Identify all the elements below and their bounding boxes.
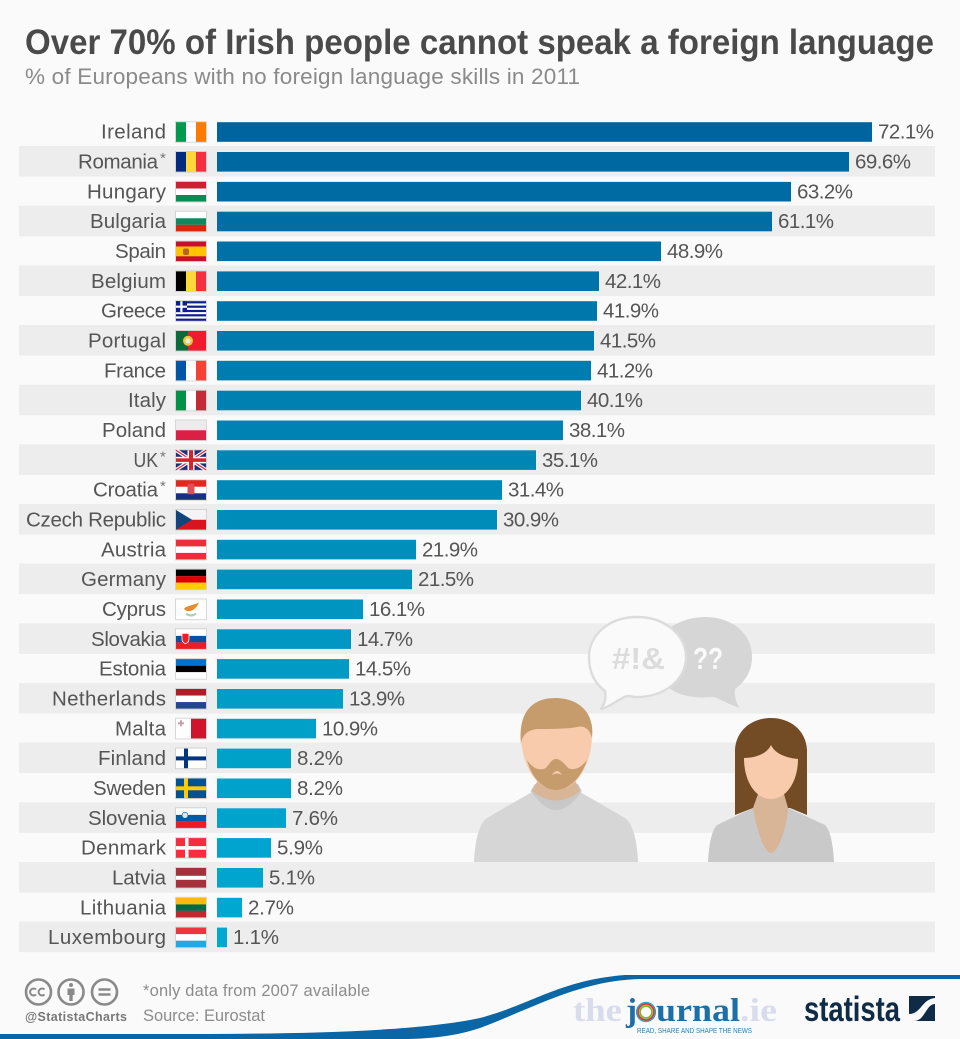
- footnote asterisk: UK: *: [160, 448, 166, 465]
- value: Sweden: 8.2%: [297, 777, 343, 800]
- flag: Slovakia: [175, 628, 207, 650]
- logo: thejournal.ie: j: [625, 993, 637, 1029]
- flag: Hungary: [175, 181, 207, 202]
- label: Poland: Poland: [102, 419, 166, 442]
- value: Italy: 40.1%: [587, 389, 643, 412]
- icons: creative commons: [26, 980, 117, 1004]
- value: Greece: 41.9%: [603, 300, 659, 323]
- row: Poland: [102, 419, 625, 442]
- bar: Austria: [217, 540, 416, 559]
- flag: Poland: [175, 420, 207, 441]
- row: Malta: [115, 717, 378, 740]
- value: Ireland: 72.1%: [878, 121, 934, 144]
- label: Ireland: Ireland: [101, 121, 166, 144]
- row: Germany: [19, 564, 935, 594]
- value: Malta: 10.9%: [322, 717, 378, 740]
- flag: UK: [175, 449, 207, 471]
- flag: Ireland: [175, 121, 207, 143]
- value: Denmark: 5.9%: [277, 837, 323, 860]
- label: UK: UK: [134, 449, 158, 472]
- value: Slovakia: 14.7%: [357, 628, 413, 651]
- logo: statista: statista: [804, 990, 900, 1029]
- bar: Slovenia: [217, 808, 286, 828]
- bar: Sweden: [217, 778, 291, 798]
- value: Netherlands: 13.9%: [349, 688, 405, 710]
- label: Portugal: Portugal: [88, 330, 166, 352]
- label: Romania: Romania: [78, 150, 159, 174]
- row: Belgium: [19, 265, 935, 296]
- bar: Poland: [217, 420, 563, 440]
- bar: Latvia: [217, 868, 263, 888]
- figure: woman: [708, 718, 834, 862]
- bar: Italy: [217, 391, 581, 410]
- flag: Belgium: [175, 270, 207, 292]
- flag: Finland: [175, 748, 207, 769]
- row: Finland: [19, 743, 935, 773]
- label: Netherlands: Netherlands: [52, 688, 166, 710]
- row: Bulgaria: [19, 206, 935, 236]
- flag: Sweden: [175, 778, 207, 799]
- bar: Denmark: [217, 838, 271, 858]
- bar: Portugal: [217, 331, 594, 351]
- flag: Romania: [175, 151, 207, 173]
- bar: Cyprus: [217, 600, 363, 619]
- bar: Croatia: [217, 480, 502, 500]
- row: Sweden: [93, 777, 343, 800]
- value: Finland: 8.2%: [297, 747, 343, 770]
- row: Estonia: [99, 658, 411, 681]
- label: Greece: Greece: [101, 300, 166, 323]
- row: Italy: [19, 385, 935, 415]
- row: Netherlands: [19, 683, 935, 714]
- label: Hungary: Hungary: [87, 180, 167, 203]
- illustration: two people talking: [474, 617, 834, 862]
- label: Belgium: Belgium: [91, 270, 166, 293]
- flag: Germany: [175, 569, 207, 590]
- value: Germany: 21.5%: [418, 568, 474, 591]
- bar: Belgium: [217, 271, 599, 291]
- label: Italy: Italy: [128, 389, 167, 412]
- flag: Bulgaria: [175, 211, 207, 232]
- row: Austria: [101, 538, 478, 561]
- bar: Slovakia: [217, 629, 351, 649]
- row: Croatia: [93, 478, 564, 502]
- value: Austria: 21.9%: [422, 538, 478, 561]
- footnote: *only data from 2007 available: [143, 982, 370, 1000]
- value: Portugal: 41.5%: [600, 330, 656, 352]
- value: France: 41.2%: [597, 359, 653, 382]
- label: Cyprus: Cyprus: [102, 598, 166, 621]
- bar: Luxembourg: [217, 928, 227, 947]
- label: Estonia: Estonia: [99, 658, 167, 681]
- value: Estonia: 14.5%: [355, 658, 411, 681]
- value: Slovenia: 7.6%: [292, 807, 338, 830]
- row: Denmark: [81, 837, 323, 860]
- bar: Estonia: [217, 659, 349, 679]
- label: Luxembourg: Luxembourg: [48, 926, 166, 949]
- text: ??: ??: [693, 641, 723, 676]
- flag: Malta: [175, 718, 207, 739]
- row: Spain: [115, 240, 723, 263]
- label: Czech Republic: Czech Republic: [26, 508, 166, 532]
- speech bubble: symbols: [589, 617, 686, 709]
- label: Denmark: Denmark: [81, 837, 167, 860]
- value: Romania: 69.6%: [855, 150, 911, 174]
- row: Portugal: [19, 325, 935, 356]
- logo: thejournal.ie: READ, SHARE AND SHAPE THE NEWS: [637, 1028, 752, 1035]
- flag: France: [175, 360, 207, 381]
- speech bubble: question marks: [655, 617, 752, 708]
- bar: Bulgaria: [217, 212, 772, 231]
- bar: Romania: [217, 152, 849, 172]
- flag: Denmark: [175, 837, 207, 859]
- value: Czech Republic: 30.9%: [503, 508, 559, 532]
- label: Bulgaria: Bulgaria: [90, 210, 167, 233]
- label: Slovenia: Slovenia: [88, 807, 167, 830]
- row: Slovenia: [19, 802, 935, 833]
- logo: thejournal.ie: [573, 993, 777, 1035]
- row: Luxembourg: [19, 922, 935, 952]
- bar chart: [19, 121, 935, 952]
- value: UK: 35.1%: [542, 449, 598, 472]
- bar: Malta: [217, 719, 316, 738]
- flag: Croatia: [175, 479, 207, 501]
- value: Lithuania: 2.7%: [248, 896, 294, 919]
- logo: thejournal.ie: .ie: [740, 993, 777, 1029]
- flag: Slovenia: [175, 807, 207, 829]
- label: Austria: Austria: [101, 538, 167, 561]
- label: France: France: [104, 359, 166, 382]
- row: Cyprus: [102, 598, 425, 621]
- bar: Lithuania: [217, 898, 242, 917]
- bar: Spain: [217, 242, 661, 261]
- label: Malta: Malta: [115, 717, 167, 740]
- flag: Spain: [175, 240, 207, 262]
- bar: Greece: [217, 301, 597, 321]
- logo: thejournal.ie: the: [573, 993, 622, 1029]
- value: Cyprus: 16.1%: [369, 598, 425, 621]
- bar: Hungary: [217, 182, 791, 202]
- footer swoosh: [0, 975, 960, 1039]
- row: Lithuania: [80, 896, 294, 919]
- row: Romania: [19, 146, 935, 177]
- flag: Italy: [175, 390, 207, 411]
- value: Belgium: 42.1%: [605, 270, 661, 293]
- flag: Luxembourg: [175, 927, 207, 948]
- row: Czech Republic: [19, 504, 935, 535]
- label: Lithuania: Lithuania: [80, 896, 167, 919]
- label: Finland: Finland: [98, 747, 166, 770]
- row: Hungary: [87, 180, 853, 203]
- value: Hungary: 63.2%: [797, 180, 853, 203]
- figure: man: [474, 698, 638, 862]
- value: Croatia: 31.4%: [508, 479, 564, 502]
- flag: Greece: [175, 300, 207, 322]
- row: Greece: [101, 300, 659, 323]
- bar: Czech Republic: [217, 510, 497, 530]
- flag: Cyprus: [175, 598, 207, 620]
- row: Ireland: [101, 121, 934, 144]
- label: Germany: Germany: [81, 568, 167, 591]
- label: Slovakia: Slovakia: [91, 628, 167, 651]
- flag: Latvia: [175, 867, 207, 889]
- footnote asterisk: Romania: *: [160, 150, 166, 167]
- subtitle: % of Europeans with no foreign language skills in 2011: [25, 64, 580, 89]
- value: Bulgaria: 61.1%: [778, 210, 834, 233]
- flag: Austria: [175, 539, 207, 560]
- handle: @StatistaCharts: [25, 1010, 127, 1024]
- logo: thejournal.ie: urnal: [656, 993, 740, 1029]
- label: Latvia: Latvia: [112, 866, 167, 890]
- bar: Germany: [217, 570, 412, 589]
- flag: Czech Republic: [175, 509, 207, 531]
- value: Poland: 38.1%: [569, 419, 625, 442]
- flag: Portugal: [175, 330, 207, 352]
- flag: Netherlands: [175, 688, 207, 710]
- flag: Estonia: [175, 658, 207, 680]
- bar: Ireland: [217, 122, 872, 142]
- bar: UK: [217, 450, 536, 470]
- text: #!&: #!&: [612, 641, 665, 676]
- label: Spain: Spain: [115, 240, 166, 263]
- row: Slovakia: [19, 623, 935, 654]
- title: Over 70% of Irish people cannot speak a foreign language: [25, 23, 934, 62]
- row: Latvia: [19, 862, 935, 893]
- value: Spain: 48.9%: [667, 240, 723, 263]
- label: Croatia: Croatia: [93, 479, 159, 502]
- label: Sweden: Sweden: [93, 777, 166, 800]
- bar: Netherlands: [217, 689, 343, 709]
- footnote asterisk: Croatia: *: [160, 478, 166, 495]
- bar: Finland: [217, 749, 291, 768]
- value: Luxembourg: 1.1%: [233, 926, 279, 949]
- value: Latvia: 5.1%: [269, 866, 315, 890]
- flag: Lithuania: [175, 897, 207, 918]
- row: UK: [19, 444, 935, 475]
- row: France: [104, 359, 653, 382]
- bar: France: [217, 361, 591, 380]
- source: Source: Eurostat: [143, 1007, 265, 1025]
